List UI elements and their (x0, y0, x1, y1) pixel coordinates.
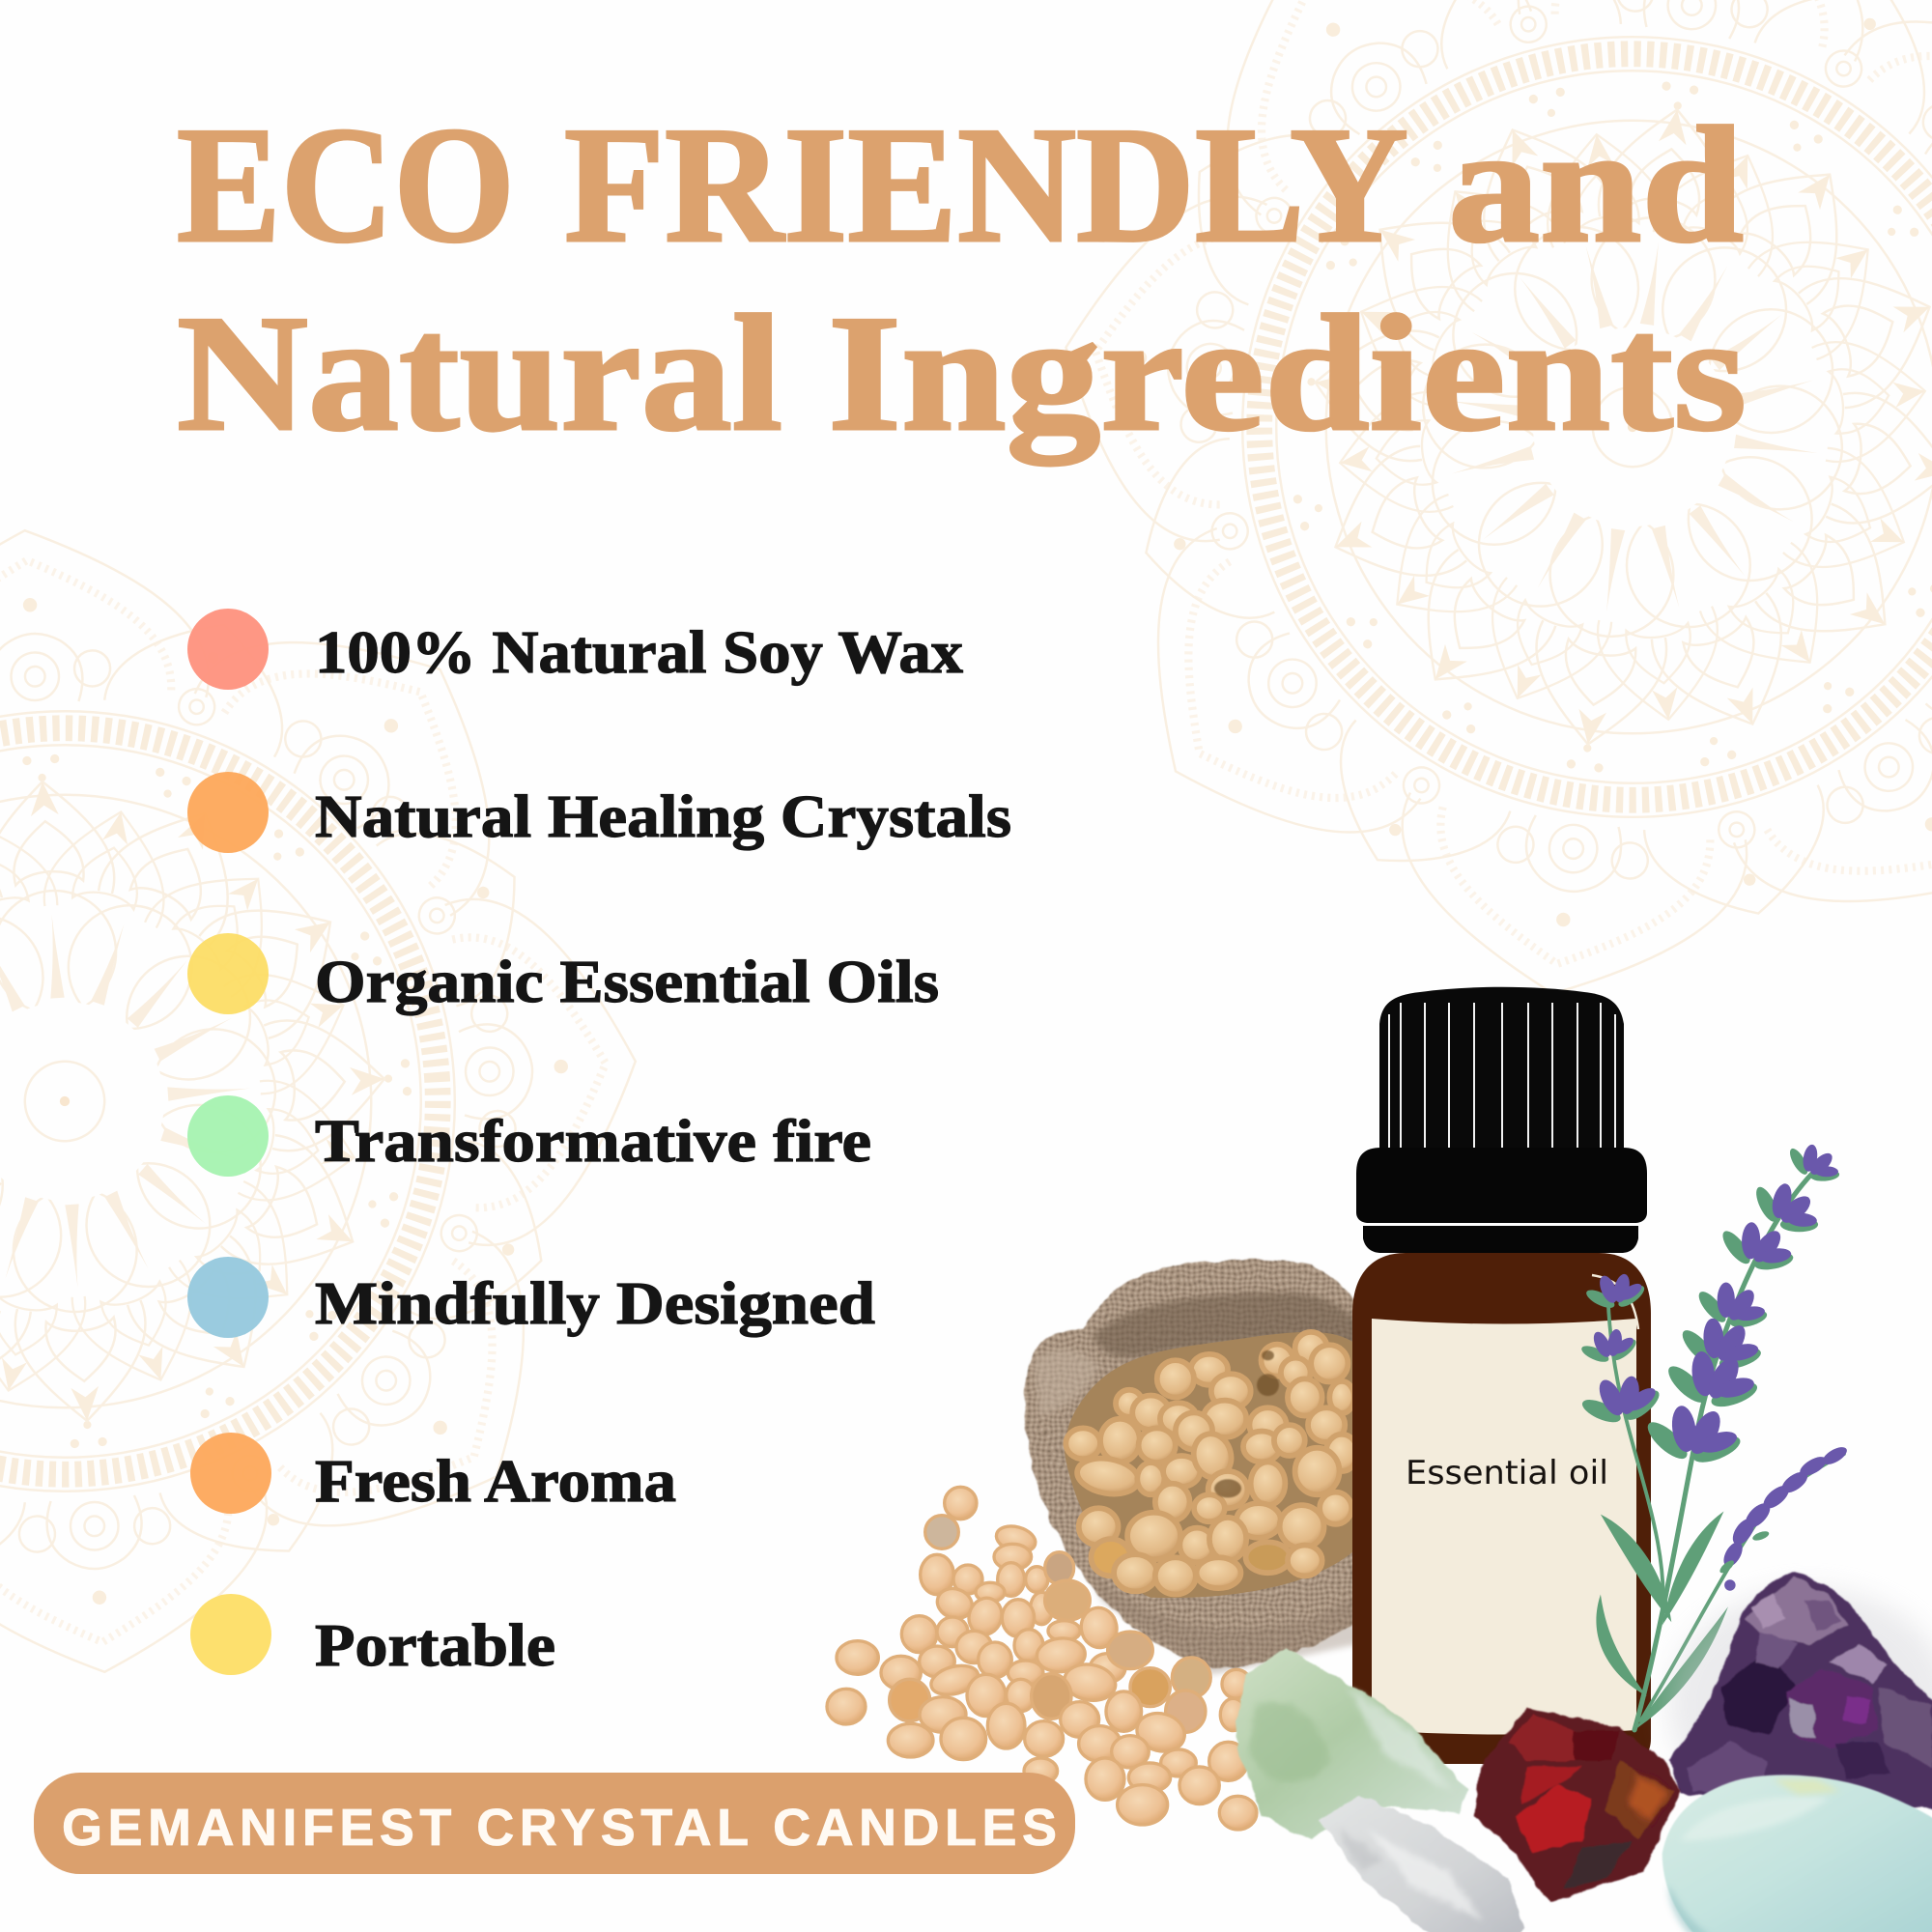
crystal: aqua stone (1662, 1775, 1932, 1932)
item: Transformative fire (187, 1095, 871, 1177)
item: 100% Natural Soy Wax (187, 609, 963, 690)
title: and (1448, 94, 1744, 277)
crystal: clear quartz (1321, 1795, 1523, 1932)
beans in sack (1065, 1332, 1358, 1595)
item: Natural Healing Crystals: Natural Healing Crystals (315, 784, 1011, 850)
item: Mindfully Designed (187, 1257, 875, 1338)
title: FRIENDLY (564, 94, 1408, 277)
title (177, 94, 1747, 466)
soybean pile (827, 1487, 1257, 1830)
feature list (187, 609, 1011, 1679)
title: Ingredients (828, 282, 1747, 466)
item: 100% Natural Soy Wax: 100% Natural Soy Wax (315, 620, 963, 686)
label text: Essential oil (1406, 1454, 1608, 1492)
mandala: left (0, 401, 765, 1802)
bottle highlight (1592, 1275, 1638, 1329)
bottle label (1372, 1319, 1636, 1735)
item: Portable: Portable (315, 1613, 555, 1679)
item: Mindfully Designed: Mindfully Designed (315, 1271, 875, 1337)
item: Transformative fire: Transformative fire (315, 1109, 871, 1175)
item: Fresh Aroma (190, 1433, 676, 1515)
title: ECO (177, 94, 515, 277)
banner (34, 1773, 1075, 1874)
soybean sack (1024, 1260, 1360, 1674)
crystal: green (1234, 1647, 1468, 1841)
item: Fresh Aroma: Fresh Aroma (315, 1449, 676, 1515)
item: Organic Essential Oils (187, 933, 939, 1015)
mandala: top right (891, 0, 1932, 1169)
cap (1356, 987, 1647, 1253)
lavender sprigs (1576, 1133, 1850, 1730)
banner: GEMANIFEST CRYSTAL CANDLES (62, 1799, 1057, 1857)
item: Portable (190, 1594, 555, 1679)
title: Natural (177, 282, 782, 466)
bottle body (1352, 1253, 1651, 1764)
crystal: garnet (1474, 1709, 1681, 1902)
crystals (1234, 1573, 1932, 1932)
amethyst shadow (1668, 1588, 1932, 1823)
item: Natural Healing Crystals (187, 772, 1011, 853)
crystal: amethyst (1668, 1573, 1932, 1810)
item: Organic Essential Oils: Organic Essential Oils (315, 950, 939, 1015)
essential oil bottle (1352, 987, 1651, 1764)
dark spots on beans (1214, 1350, 1279, 1497)
